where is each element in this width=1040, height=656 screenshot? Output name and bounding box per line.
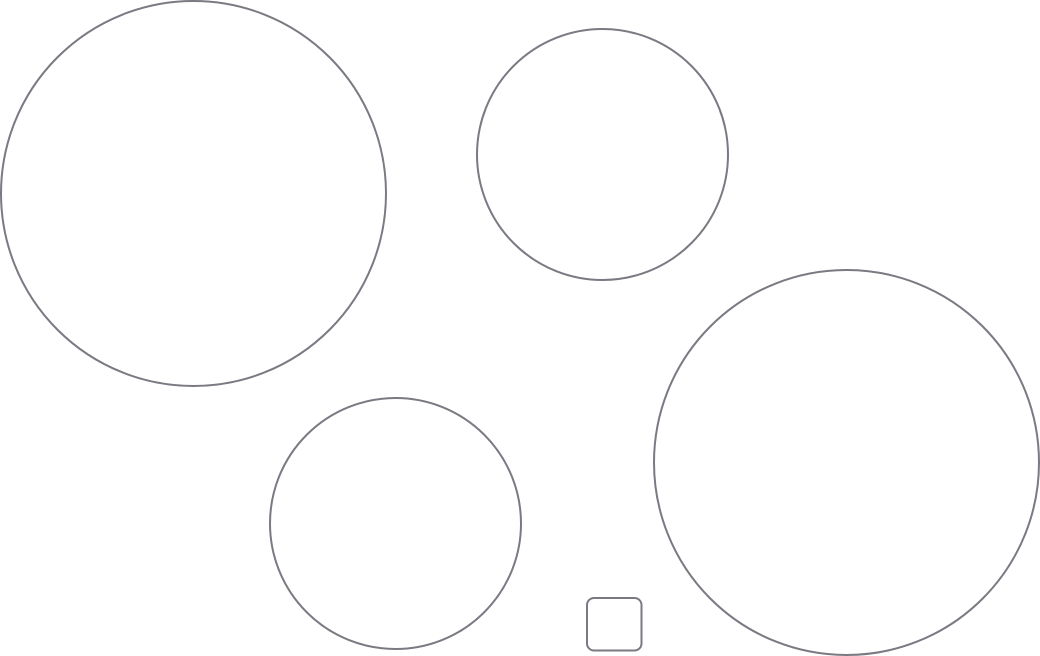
medium circle: top centre xyxy=(477,29,728,280)
small rounded square xyxy=(587,598,642,650)
large circle: top left xyxy=(1,1,386,386)
medium circle: bottom centre xyxy=(270,398,521,649)
large circle: bottom right xyxy=(654,270,1039,655)
